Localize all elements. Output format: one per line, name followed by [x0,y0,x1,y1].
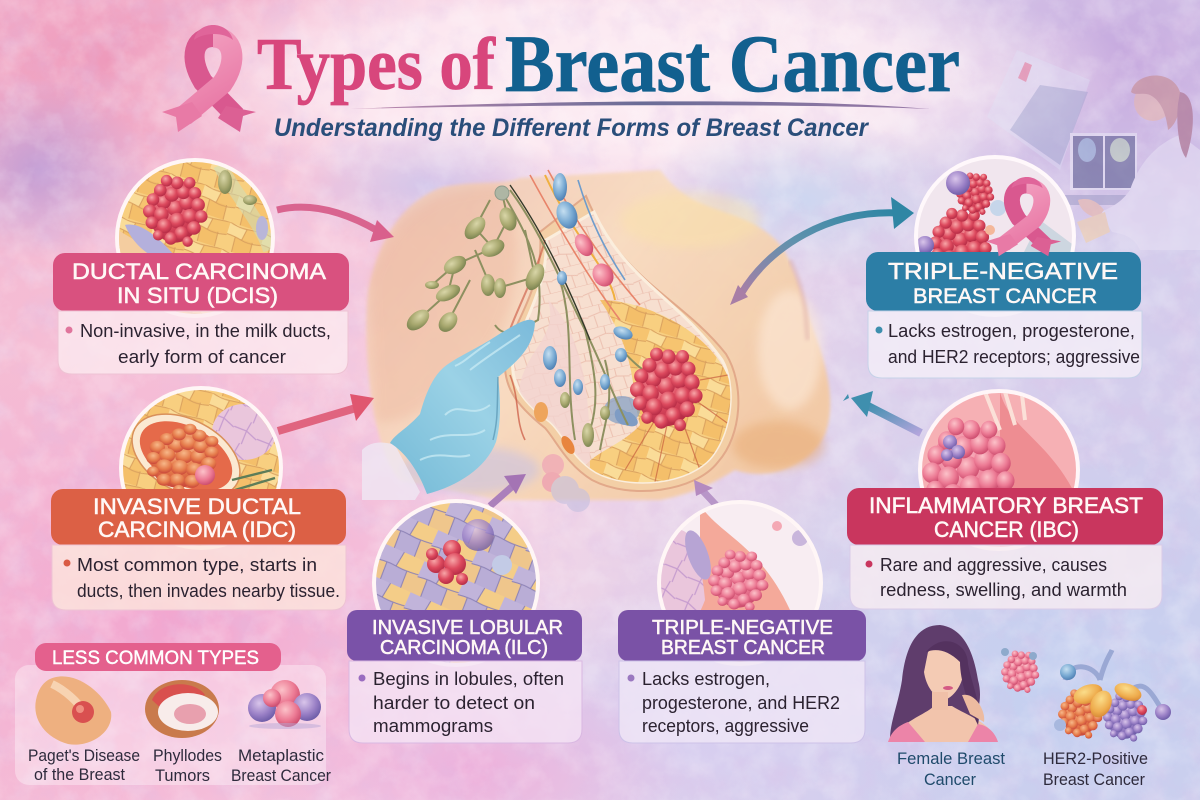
icon: small awareness ribbon [986,177,1061,256]
faded pink lobes below breast [542,454,590,512]
caption: phyllodes tumors: Tumors [155,767,210,785]
dissected breast [505,170,738,491]
panel: triple-negative breast cancer, purple [618,498,866,743]
header: IBC: INFLAMMATORY BREAST [869,493,1143,518]
caption: Paget's disease: of the Breast [34,766,125,784]
description: DCIS [58,311,348,374]
panel: invasive ductal carcinoma [51,386,346,610]
icon: phyllodes tumor [145,680,219,738]
description: triple-negative purple: progesterone, and HER2 [642,692,840,713]
caption: phyllodes tumors [153,747,222,785]
header: IDC: INVASIVE DUCTAL [93,494,301,519]
header: ILC [347,610,582,661]
title [257,18,960,109]
header: DCIS: DUCTAL CARCINOMA [72,259,326,284]
icon: small cell cluster [1001,648,1039,693]
arrow: ILC to breast [490,474,526,506]
icon: lower triple-negative tissue circle [655,498,825,670]
header: ILC: CARCINOMA (ILC) [380,636,548,659]
label: less common types: LESS COMMON TYPES [52,647,259,669]
icon: metaplastic breast cancer [248,680,321,729]
description: IDC [52,545,346,610]
header: ILC: INVASIVE LOBULAR [372,616,563,639]
panel backing [15,665,326,785]
icon: upper triple-negative tissue circle [914,155,1076,252]
caption: phyllodes tumors: Phyllodes [153,747,222,765]
panel: less common types [15,643,331,785]
subtitle: Understanding the Different Forms of Breast Cancer [274,114,869,142]
arrow: inflammatory to breast [843,391,921,433]
header: IDC [51,489,346,545]
caption: HER2-positive breast cancer: HER2-Positive [1043,750,1148,768]
lymph nodes and ducts [403,173,652,456]
title: Types of [257,24,496,106]
header: IBC [847,488,1163,545]
description: IDC: Most common type, starts in [77,554,317,575]
icon: HER2-positive cluster [1054,650,1171,742]
title: Breast Cancer [505,18,960,109]
gloved hand [362,320,535,500]
description: DCIS: Non-invasive, in the milk ducts, [80,320,331,341]
caption: metaplastic breast cancer [231,747,331,785]
panel: triple-negative breast cancer, blue [866,155,1142,378]
caption: HER2-positive breast cancer: Breast Cancer [1043,771,1145,789]
description: IDC: ducts, then invades nearby tissue. [77,580,340,601]
caption: female breast cancer: Female Breast [897,750,1005,768]
header: triple-negative purple: BREAST CANCER [661,636,825,659]
caption: Paget's disease [28,747,140,784]
header: triple-negative purple [618,610,866,661]
header: triple-negative blue [866,252,1141,311]
arrow: double-headed blue [730,197,914,305]
description: triple-negative purple [619,661,865,743]
main tumor cluster [630,348,703,431]
header: IBC: CANCER (IBC) [934,517,1079,542]
label: less common types [35,643,281,671]
caption: female breast cancer [897,750,1005,789]
torso skin [366,170,830,500]
icon: IBC tissue circle [918,389,1083,555]
header: triple-negative blue: BREAST CANCER [913,285,1097,308]
description: triple-negative blue [868,311,1142,378]
caption: HER2-positive breast cancer [1043,750,1148,789]
description: ILC [349,661,582,743]
title ribbon icon [162,25,256,132]
description: IBC: Rare and aggressive, causes [880,554,1107,575]
header: DCIS [53,253,349,311]
icon: Paget's disease [35,676,111,745]
description: DCIS: early form of cancer [118,346,286,367]
caption: metaplastic breast cancer: Breast Cancer [231,767,331,785]
doctor at workstation, faded illustration [987,50,1200,250]
header: triple-negative blue: TRIPLE-NEGATIVE [888,258,1118,284]
description: triple-negative blue: and HER2 receptors; aggressive [888,346,1140,367]
description: triple-negative purple: receptors, aggressive [642,715,809,736]
caption: female breast cancer: Cancer [924,771,976,789]
title underline swoosh [350,101,930,109]
arrow: IDC to breast [278,394,374,431]
torso illustration [362,170,830,512]
caption: Paget's disease: Paget's Disease [28,747,140,765]
description: triple-negative purple: Lacks estrogen, [642,668,770,689]
header: IDC: CARCINOMA (IDC) [98,517,296,542]
description: ILC: Begins in lobules, often [373,668,564,689]
panel: invasive lobular carcinoma [347,498,582,743]
portrait: woman [888,625,998,742]
arrow: DCIS to breast [277,207,394,242]
panel: ductal carcinoma in situ [53,158,349,374]
arrow: triple-negative purple to breast [694,480,716,505]
header: triple-negative purple: TRIPLE-NEGATIVE [652,616,833,639]
icon: DCIS tissue circle [115,158,275,320]
description: triple-negative blue: Lacks estrogen, progesterone, [888,320,1135,341]
description: ILC: harder to detect on [373,692,535,713]
icon: ILC tissue circle [370,498,540,668]
icon: IDC tissue circle [118,386,285,553]
header: DCIS: IN SITU (DCIS) [117,283,278,308]
description: ILC: mammograms [373,715,493,736]
description: IBC [850,545,1162,609]
description: IBC: redness, swelling, and warmth [880,579,1127,600]
caption: metaplastic breast cancer: Metaplastic [238,747,324,765]
panel: inflammatory breast cancer [847,389,1163,609]
